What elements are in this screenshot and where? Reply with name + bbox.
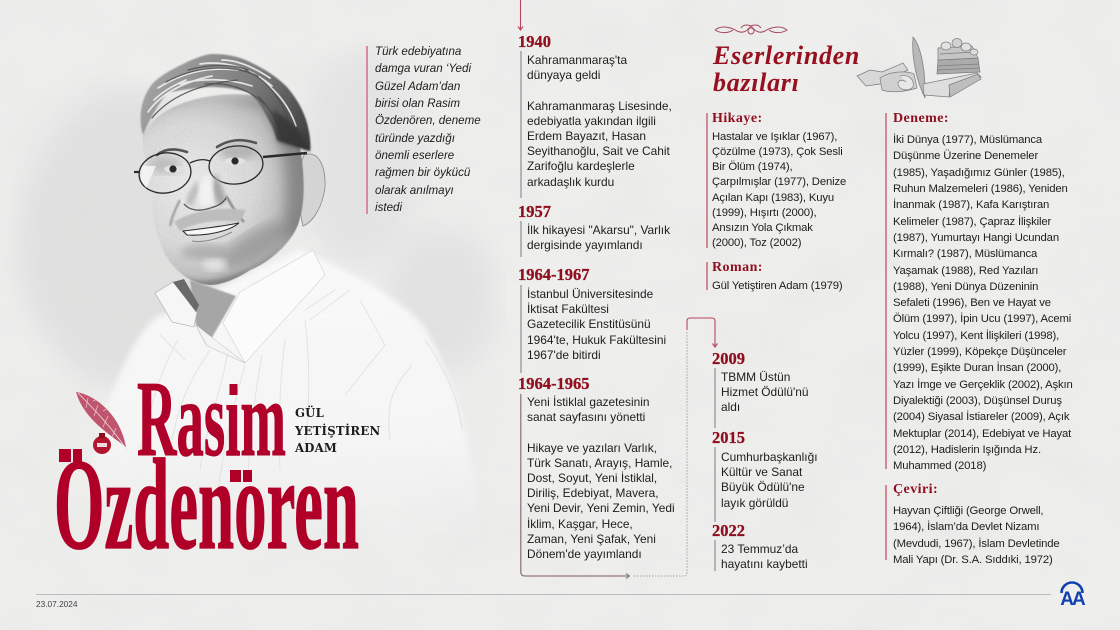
text 1940: dünyaya geldi (527, 68, 600, 82)
shirt (92, 250, 480, 545)
year 2022: 2022 (712, 521, 745, 540)
text 1940 (527, 53, 672, 189)
moustache (174, 209, 246, 231)
text Hikaye: (2000), Toz (2002) (712, 237, 801, 249)
heading: Eserlerinden bazıları (712, 41, 860, 97)
text 1964-1967 (527, 287, 666, 362)
timeline entry 1964-1967 (518, 265, 666, 373)
rule 2015 (714, 447, 716, 522)
text Deneme: İnanmak (1987), Kafa Karıştıran (893, 199, 1049, 211)
rule 2022 (714, 540, 716, 571)
works panel: Çeviri (885, 482, 1060, 566)
text Çeviri: Mali Yapı (Dr. S.A. Sıddıki, 1972) (893, 554, 1053, 566)
text 1964-1967: 1964'te, Hukuk Fakültesini (527, 333, 666, 347)
intro text block: türünde yazdığı (375, 132, 455, 145)
text Deneme: Yaşamak (1988), Red Yazıları (893, 264, 1038, 276)
text Çeviri: Hayvan Çiftliği (George Orwell, (893, 505, 1043, 517)
text 1964-1965: İklim, Kaşgar, Hece, (527, 517, 633, 531)
facial shading (143, 94, 304, 285)
text Hikaye: Hastalar ve Işıklar (1967), (712, 131, 837, 143)
text 2022: hayatını kaybetti (721, 557, 808, 571)
text 1940: Erdem Bayazıt, Hasan (527, 129, 646, 143)
text Çeviri (893, 505, 1060, 566)
intro text block: önemli eserlere (375, 149, 454, 162)
text 2009: aldı (721, 400, 740, 414)
text 1964-1965: Zaman, Yeni Şafak, Yeni (527, 532, 656, 546)
text 1964-1965: Türk Sanatı, Arayış, Hamle, (527, 456, 672, 470)
text 2015 (721, 450, 818, 510)
text 1940: Seyithanoğlu, Sait ve Cahit (527, 144, 670, 158)
text Deneme: (2012), Hadislerin Işığında Hz. (893, 444, 1041, 456)
text 2009: TBMM Üstün (721, 370, 790, 384)
rule 1957 (520, 221, 522, 257)
text 1964-1965: Hikaye ve yazıları Varlık, (527, 441, 657, 455)
text 1964-1965: Yeni İstiklal gazetesinin (527, 395, 650, 409)
text 1940: Kahramanmaraş Lisesinde, (527, 99, 672, 113)
text Deneme: Ölüm (1997), İpin Ucu (1997), Acemi (893, 313, 1071, 325)
glasses (134, 143, 307, 196)
text 1964-1965: Diriliş, Edebiyat, Mavera, (527, 486, 658, 500)
text 1964-1965: Yeni Devir, Yeni Zemin, Yedi (527, 501, 675, 515)
text Deneme: Sefaleti (1996), Ben ve Hayat ve (893, 297, 1051, 309)
ear (299, 154, 325, 226)
timeline entry 2009 (712, 349, 809, 428)
intro text block: damga vuran ‘Yedi (375, 62, 471, 75)
text Deneme: Diyalektiği (2003), Düşünsel Duruş (893, 395, 1062, 407)
rule 2009 (714, 368, 716, 428)
text Deneme: Ruhun Malzemeleri (1986), Yeniden (893, 183, 1068, 195)
arrow: timeline start (518, 0, 524, 31)
hair (141, 54, 310, 151)
year 1957: 1957 (518, 202, 551, 221)
portrait of Rasim Özdenören (104, 53, 466, 487)
text 1964-1967: İktisat Fakültesi (527, 302, 609, 316)
text Hikaye: Bir Ölüm (1974), (712, 161, 792, 173)
year 1964-1965: 1964-1965 (518, 374, 590, 393)
text 1964-1965 (527, 395, 675, 561)
rule Çeviri (885, 485, 886, 560)
text Deneme: Yolcu (1997), Kent İlişkileri (1998), (893, 330, 1059, 342)
text Deneme: Muhammed (2018) (893, 460, 986, 472)
text Hikaye: (1999), Hışırtı (2000), (712, 207, 817, 219)
intro text block: olarak anılmayı (375, 184, 454, 197)
chin highlight (203, 259, 227, 271)
heading Roman: Roman: (712, 260, 763, 275)
works panel: Hikaye (706, 111, 846, 249)
text 1957: dergisinde yayımlandı (527, 238, 643, 252)
footer rule (36, 594, 1051, 595)
year 2009: 2009 (712, 349, 745, 368)
subtitle: ADAM (295, 441, 337, 455)
rule 1964-1967 (520, 285, 522, 373)
ornament (714, 24, 788, 34)
nose (184, 172, 226, 210)
rule 1940 (520, 51, 522, 198)
text Deneme: Yüzler (1999), Köpekçe Düşünceler (893, 346, 1066, 358)
text 1964-1965: Dönem'de yayımlandı (527, 547, 642, 561)
text 2009 (721, 370, 809, 414)
text 1964-1967: İstanbul Üniversitesinde (527, 287, 653, 301)
icon: quill and ink bottle (76, 392, 127, 454)
subtitle (294, 406, 380, 455)
text 2015: layık görüldü (721, 496, 788, 510)
timeline entry 1957 (518, 202, 670, 257)
text Deneme (893, 134, 1073, 472)
text 2022: 23 Temmuz’da (721, 542, 798, 556)
text Deneme: (1985), Yaşadığımız Günler (1985), (893, 167, 1065, 179)
arrow: timeline connector (520, 318, 718, 579)
text Deneme: (1987), Yumurtayı Hangi Ucundan (893, 232, 1059, 244)
text Deneme: Kelimeler (1987), Çapraz İlişkiler (893, 216, 1051, 228)
works panel: Deneme (885, 111, 1073, 472)
text Çeviri: (Mevdudi, 1967), İslam Devletinde (893, 538, 1059, 550)
text 2015: Kültür ve Sanat (721, 465, 802, 479)
heading: Eserlerinden bazıları: bazıları (713, 68, 800, 97)
name title (56, 384, 358, 550)
logo: AA (1060, 581, 1086, 608)
heading Hikaye: Hikaye: (712, 111, 763, 126)
text 1957 (527, 223, 670, 252)
rule Deneme (885, 113, 886, 469)
illustration: scrolls, quill and books (856, 36, 982, 98)
text 1964-1967: Gazetecilik Enstitüsünü (527, 317, 651, 331)
subtitle: GÜL (295, 406, 324, 420)
text 2009: Hizmet Ödülü'nü (721, 385, 809, 399)
eyes (164, 157, 245, 173)
text 1940: arkadaşlık kurdu (527, 175, 614, 189)
mouth (183, 223, 239, 241)
text Deneme: (1988), Yeni Dünya Düzeninin (893, 281, 1038, 293)
intro text block: Türk edebiyatına (375, 45, 461, 58)
text Hikaye (712, 131, 846, 249)
text Deneme: Düşünme Üzerine Denemeler (893, 150, 1038, 162)
text Deneme: Yazı İmge ve Gerçeklik (2002), Aşkın (893, 379, 1073, 391)
heading Çeviri: Çeviri: (893, 482, 938, 497)
neck (190, 280, 236, 346)
text 1964-1965: Dost, Soyut, Yeni İstiklal, (527, 471, 657, 485)
intro text block (366, 45, 481, 214)
intro text block: birisi olan Rasim (375, 97, 460, 110)
year 1940: 1940 (518, 32, 551, 51)
intro text block: rağmen bir öykücü (375, 166, 470, 179)
subtitle: YETİŞTİREN (295, 424, 380, 438)
heading Deneme: Deneme: (893, 111, 949, 126)
text Hikaye: Açılan Kapı (1983), Kuyu (712, 192, 834, 204)
text Hikaye: Ansızın Yola Çıkmak (712, 222, 813, 234)
text Deneme: (1999), Eşikte Duran İnsan (2000), (893, 362, 1061, 374)
date: 23.07.2024 (36, 599, 78, 609)
intro text block: istedi (375, 201, 402, 214)
text Deneme: (2004) Siyasal İstiareler (2009), Açık (893, 411, 1069, 423)
text Çeviri: 1964), İslam’da Devlet Nizamı (893, 521, 1039, 533)
text 1964-1965: sanat sayfasını yönetti (527, 410, 645, 424)
text 2015: Cumhurbaşkanlığı (721, 450, 818, 464)
text 2022 (721, 542, 808, 571)
text 1940: Zarifoğlu kardeşlerle (527, 159, 635, 173)
text Deneme: Mektuplar (2014), Edebiyat ve Hayat (893, 428, 1071, 440)
year 1964-1967: 1964-1967 (518, 265, 590, 284)
text Hikaye: Çözülme (1973), Çok Sesli (712, 146, 843, 158)
year 2015: 2015 (712, 428, 745, 447)
text Deneme: İki Dünya (1977), Müslümanca (893, 134, 1042, 146)
text 2015: Büyük Ödülü'ne (721, 480, 805, 494)
text 1957: İlk hikayesi "Akarsu", Varlık (527, 223, 670, 237)
text Deneme: Kırmalı? (1987), Müslümanca (893, 248, 1037, 260)
intro text block: Özdenören, deneme (375, 114, 481, 127)
text 1964-1967: 1967'de bitirdi (527, 348, 601, 362)
text 1940: Kahramanmaraş'ta (527, 53, 627, 67)
timeline entry 2015 (712, 428, 818, 522)
shirt collar (155, 250, 325, 363)
text Hikaye: Çarpılmışlar (1977), Denize (712, 176, 846, 188)
text 1940: edebiyatla yakından ilgili (527, 114, 656, 128)
text Roman: Gül Yetiştiren Adam (1979) (712, 280, 842, 292)
works panel: Roman (706, 260, 842, 292)
face (143, 94, 304, 285)
timeline entry 2022 (712, 521, 808, 571)
intro text block: Güzel Adam’dan (375, 80, 460, 93)
timeline entry 1964-1965 (518, 374, 675, 561)
timeline entry 1940 (518, 32, 672, 198)
rule Hikaye (706, 113, 708, 248)
heading: Eserlerinden bazıları: Eserlerinden (713, 41, 860, 70)
eyebrows (157, 140, 256, 155)
rule Roman (706, 262, 708, 290)
